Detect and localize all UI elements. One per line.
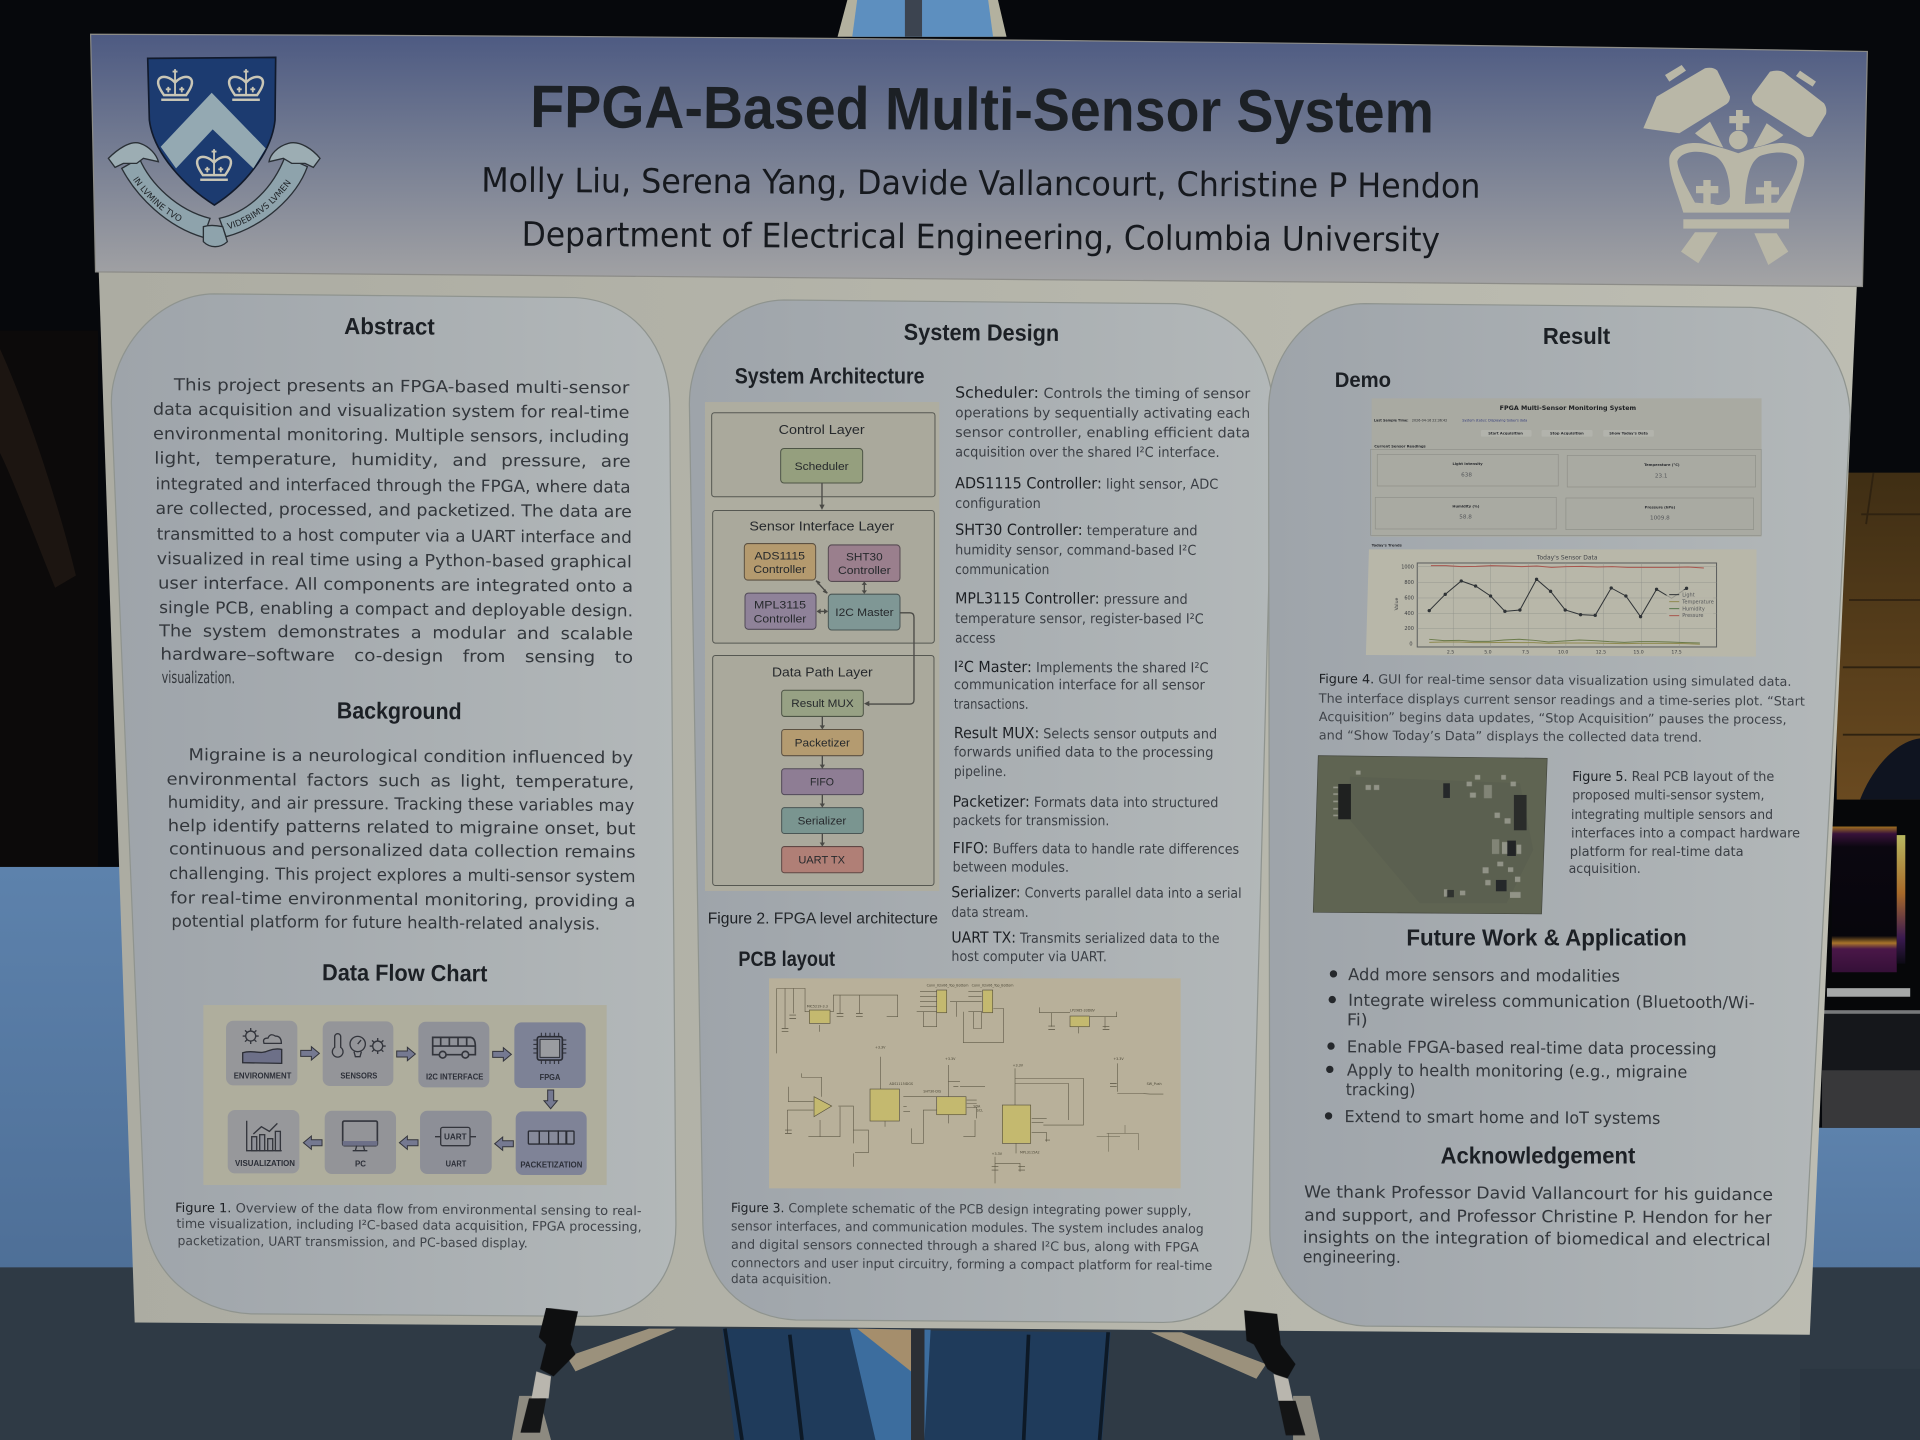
text: module descriptions: temperature sensor, register-based I²C xyxy=(955,611,1204,627)
box: UART TX xyxy=(782,847,863,873)
text: module descriptions: ADS1115 Controller: light sensor, ADC xyxy=(955,474,1218,493)
tile: FPGA: FPGA xyxy=(540,1073,561,1082)
caption: figure 3 xyxy=(731,1201,1212,1290)
heading: System Architecture: System Architecture xyxy=(735,363,924,388)
trend chart: 800 xyxy=(1404,580,1414,586)
figure: GUI screenshot: Current Sensor Readings xyxy=(1374,444,1426,448)
box: Scheduler xyxy=(781,449,863,483)
text: background body: for real-time environmental monitoring, providing a xyxy=(170,888,636,911)
figure: PCB schematic: Conn_02x06_Top_Bottom xyxy=(927,984,969,988)
text: background body: humidity, and air pressure. Tracking these variables may xyxy=(168,793,634,815)
text: background body: continuous and personalized data collection remains xyxy=(169,839,636,862)
figure: GUI screenshot: Today's Trends xyxy=(1372,544,1402,548)
trend chart: 1000 xyxy=(1401,565,1414,571)
text: module descriptions: Packetizer: Formats data into structured xyxy=(953,793,1218,811)
list: future work: Integrate wireless communication (Bluetooth/Wi- xyxy=(1348,991,1755,1012)
figure: PCB schematic: +3.3V xyxy=(1013,1064,1024,1068)
heading: Future Work & Application: Future Work & Application xyxy=(1406,924,1687,950)
text: abstract body: light, temperature, humidity, and pressure, are xyxy=(154,449,631,471)
tile: UART: UART xyxy=(444,1132,467,1142)
figure: PCB schematic: +3.3V xyxy=(992,1152,1003,1156)
text: module descriptions: packets for transmission. xyxy=(953,813,1109,829)
list: future work: Enable FPGA-based real-time data processing xyxy=(1347,1037,1717,1059)
layer labels: Control Layer xyxy=(779,423,865,437)
text: background body: Migraine is a neurological condition influenced by xyxy=(189,745,633,767)
heading: Data Flow Chart: Data Flow Chart xyxy=(322,959,488,986)
figure: GUI screenshot: System status: Displaying today's data xyxy=(1462,419,1527,423)
figure: GUI screenshot: Last Sample Time: xyxy=(1374,418,1409,422)
ribbon xyxy=(108,142,321,248)
caption: figure 1 xyxy=(175,1201,642,1252)
text: module descriptions: forwards unified data to the processing xyxy=(954,744,1213,761)
trend chart: 10.0 xyxy=(1558,650,1568,656)
layer labels xyxy=(749,423,894,680)
trend chart: Value xyxy=(1394,597,1400,610)
list: future work: Fi) xyxy=(1347,1010,1368,1030)
caption: figure 5: platform for real-time data xyxy=(1570,845,1744,860)
chart legend: Light xyxy=(1682,592,1695,598)
box: Packetizer: Packetizer xyxy=(795,737,850,749)
text: background body: challenging. This project explores a multi-sensor system xyxy=(169,864,636,886)
trend chart: 12.5 xyxy=(1596,650,1606,656)
trend chart: Today's Sensor Data xyxy=(1536,555,1598,562)
text: abstract body: This project presents an FPGA-based multi-sensor xyxy=(173,375,630,398)
trend chart xyxy=(1366,549,1757,657)
box: ADS1115: ADS1115 xyxy=(754,550,805,562)
figure: PCB schematic: +3.3V xyxy=(875,1045,886,1049)
caption: figure 5: acquisition. xyxy=(1569,862,1641,877)
box: I2C Master: I2C Master xyxy=(835,607,894,619)
text: module descriptions: communication xyxy=(955,562,1049,578)
caption: figure 5 xyxy=(1569,770,1800,877)
figure: PCB schematic: +3.3V xyxy=(945,1057,956,1061)
tile: environment: ENVIRONMENT xyxy=(234,1071,291,1080)
panel: left column xyxy=(111,294,676,1316)
heading: Result: Result xyxy=(1543,323,1610,349)
text: abstract body: data acquisition and visualization system for real-time xyxy=(153,400,629,422)
text: module descriptions: configuration xyxy=(955,496,1041,512)
figure: GUI screenshot: 1009.8 xyxy=(1650,516,1670,522)
text: abstract body: transmitted to a host computer via a UART interface and xyxy=(157,525,632,547)
layer labels: Data Path Layer xyxy=(772,665,873,680)
text: module descriptions: humidity sensor, command-based I²C xyxy=(955,542,1196,559)
GUI buttons: Stop Acquisition xyxy=(1550,432,1584,436)
trend chart: 400 xyxy=(1404,611,1414,617)
sensor reading cards xyxy=(1371,449,1761,535)
background: table cloth xyxy=(0,867,1920,1440)
chart legend: Humidity xyxy=(1682,606,1705,612)
box: Result MUX: Result MUX xyxy=(791,698,854,710)
figure: GUI screenshot: Humidity (%) xyxy=(1452,504,1480,508)
text: background body: potential platform for future health-related analysis. xyxy=(171,912,600,934)
box: MPL3115: MPL3115 xyxy=(754,600,806,612)
trend chart: 17.5 xyxy=(1671,650,1682,656)
tile: environment xyxy=(226,1021,297,1085)
text: abstract body: single PCB, enabling a compact and deployable design. xyxy=(159,598,633,620)
caption: figure 3: connectors and user input circuitry, forming a compact platform for real-time xyxy=(731,1256,1212,1274)
tile: PC: PC xyxy=(355,1160,366,1169)
trend chart: 7.5 xyxy=(1522,650,1529,656)
text: abstract body: visualized in real time using a Python-based graphical xyxy=(157,549,632,571)
text: module descriptions: I²C Master: Implements the shared I²C xyxy=(954,658,1209,676)
text: module descriptions: access xyxy=(955,631,996,647)
caption: figure 3: sensor interfaces, and communication modules. The system includes analog xyxy=(731,1219,1204,1237)
text: module descriptions: communication interface for all sensor xyxy=(954,677,1205,694)
figure: PCB photo xyxy=(1313,756,1547,914)
chart: data flow xyxy=(203,1005,607,1185)
tile: FPGA xyxy=(514,1022,586,1088)
figure: GUI screenshot: 638 xyxy=(1461,472,1472,478)
list: future work: Add more sensors and modalities xyxy=(1348,965,1620,986)
arrows: connections xyxy=(816,483,914,847)
heading: Background: Background xyxy=(337,697,462,724)
text: module descriptions: sensor controller, enabling efficient data xyxy=(955,425,1250,441)
text: module descriptions: data stream. xyxy=(951,905,1029,921)
text: abstract body: visualization. xyxy=(162,668,235,687)
GUI buttons: Show Today's Data xyxy=(1609,432,1648,436)
trend chart: 15.0 xyxy=(1633,650,1644,656)
figure: PCB schematic: MPL3115A2 xyxy=(1020,1150,1040,1154)
panel: middle column xyxy=(689,300,1273,1322)
figure: PCB schematic xyxy=(769,978,1181,1188)
tile: I2C interface: I2C INTERFACE xyxy=(426,1072,484,1081)
tile: visualization xyxy=(228,1110,299,1173)
text: acknowledgement xyxy=(1303,1182,1773,1269)
text: module descriptions xyxy=(951,384,1251,966)
heading: System Design: System Design xyxy=(904,319,1059,346)
ribbon: VIDEBIMVS LVMEN xyxy=(226,180,291,229)
box: SHT30: Controller xyxy=(838,565,891,577)
heading: PCB layout: PCB layout xyxy=(738,947,835,971)
figure: PCB schematic: MIC5219-3.3 xyxy=(807,1004,828,1008)
authors: Molly Liu, Serena Yang, Davide Vallancourt, Christine P Hendon xyxy=(481,161,1481,206)
caption: figure 4: and “Show Today’s Data” displays the collected data trend. xyxy=(1319,728,1702,746)
text: abstract body: user interface. All components are integrated onto a xyxy=(158,574,633,596)
trend chart: 5.0 xyxy=(1484,650,1492,656)
text: background body: environmental factors such as light, temperature, xyxy=(167,770,634,792)
chart legend: Temperature xyxy=(1681,599,1714,605)
chevron xyxy=(161,93,266,168)
GUI buttons xyxy=(1481,430,1654,437)
text: module descriptions: MPL3115 Controller: pressure and xyxy=(955,589,1188,608)
box: SHT30 xyxy=(828,545,900,581)
box: MPL3115: Controller xyxy=(754,613,807,625)
text: module descriptions: Result MUX: Selects sensor outputs and xyxy=(954,724,1217,743)
text: module descriptions: operations by sequentially activating each xyxy=(955,405,1250,422)
text: acknowledgement: and support, and Professor Christine P. Hendon for her xyxy=(1304,1206,1772,1227)
text: module descriptions: UART TX: Transmits serialized data to the xyxy=(951,929,1220,947)
caption: figure 1: time visualization, including I²C-based data acquisition, FPGA processing, xyxy=(176,1217,642,1235)
tile: UART xyxy=(420,1111,492,1174)
text: module descriptions: pipeline. xyxy=(954,764,1007,780)
caption: figure 1: Figure 1. Overview of the data flow from environmental sensing to real- xyxy=(175,1201,642,1219)
box: Packetizer xyxy=(782,730,863,756)
caption: figure 3: data acquisition. xyxy=(731,1272,831,1288)
text: background body xyxy=(167,745,636,934)
curtain and easel legs below poster xyxy=(512,1329,1320,1440)
chart legend xyxy=(1667,590,1714,620)
caption: figure 5: Figure 5. Real PCB layout of the xyxy=(1572,770,1774,785)
caption: figure 4: Figure 4. GUI for real-time sensor data visualization using simulated data. xyxy=(1319,672,1791,690)
department: Department of Electrical Engineering, Columbia University xyxy=(522,215,1440,259)
heading: Abstract: Abstract xyxy=(344,313,435,340)
list: future work: tracking) xyxy=(1346,1080,1416,1100)
trend chart: 2.5 xyxy=(1447,650,1454,656)
caption: figure 1: packetization, UART transmission, and PC-based display. xyxy=(178,1234,528,1251)
box: ADS1115: Controller xyxy=(753,564,806,576)
figure: PCB schematic: SCL xyxy=(977,1109,983,1113)
figure: PCB schematic: LP2985-33DBV xyxy=(1070,1009,1096,1013)
box: I2C Master xyxy=(828,594,900,630)
text: abstract body: hardware–software co-design from sensing to xyxy=(160,645,633,667)
figure: GUI screenshot: Light Intensity xyxy=(1452,462,1483,466)
caption: figure 4 xyxy=(1318,672,1805,746)
caption: figure 3: Figure 3. Complete schematic of the PCB design integrating power supply, xyxy=(731,1201,1191,1219)
tile: PC xyxy=(325,1111,396,1174)
caption: figure 4: The interface displays current sensor readings and a time-series plot. “Start xyxy=(1318,692,1805,710)
tile: UART: UART xyxy=(446,1160,466,1169)
figure: GUI screenshot: FPGA Multi-Sensor Monitoring System xyxy=(1500,405,1637,412)
figure: PCB schematic: SW_Push xyxy=(1147,1082,1162,1086)
text: acknowledgement: engineering. xyxy=(1303,1247,1401,1267)
caption: figure 2: Figure 2. FPGA level architecture xyxy=(708,910,938,927)
box: FIFO: FIFO xyxy=(810,776,834,789)
box: Serializer: Serializer xyxy=(798,815,847,828)
box: UART TX: UART TX xyxy=(798,854,845,866)
box: Scheduler: Scheduler xyxy=(795,461,849,473)
text: acknowledgement: We thank Professor David Vallancourt for his guidance xyxy=(1304,1182,1773,1204)
figure: PCB schematic: SHT30-DIS xyxy=(923,1090,941,1094)
box: FIFO xyxy=(782,769,863,795)
logo: Columbia crown xyxy=(1643,65,1826,265)
list: future work: Extend to smart home and IoT systems xyxy=(1344,1107,1660,1128)
caption: figure 4: Acquisition” begins data updates, “Stop Acquisition” pauses the process, xyxy=(1319,710,1787,728)
figure: GUI screenshot: Temperature (°C) xyxy=(1644,463,1680,467)
figure: PCB schematic: +3.3V xyxy=(1113,1057,1124,1061)
text: module descriptions: acquisition over the shared I²C interface. xyxy=(955,444,1220,461)
caption: figure 5: proposed multi-sensor system, xyxy=(1572,789,1764,804)
header band xyxy=(91,34,1867,287)
figure: GUI screenshot: 58.8 xyxy=(1459,515,1472,521)
tile: sensors xyxy=(323,1021,393,1086)
easel top xyxy=(838,0,1007,37)
figure: GUI screenshot: 2026-04-16 22:36:42 xyxy=(1412,418,1447,422)
GUI buttons: Start Acquisition xyxy=(1488,432,1523,436)
box: Serializer xyxy=(782,808,863,833)
list: future work: Apply to health monitoring (e.g., migraine xyxy=(1347,1061,1687,1082)
list: future work xyxy=(1325,965,1755,1129)
text: module descriptions: Serializer: Converts parallel data into a serial xyxy=(951,883,1242,902)
layer labels: Sensor Interface Layer xyxy=(749,519,894,534)
text: module descriptions: SHT30 Controller: temperature and xyxy=(955,521,1198,539)
figure: PCB schematic: Conn_02x06_Top_Bottom xyxy=(972,984,1014,988)
tile: packetization: PACKETIZATION xyxy=(520,1160,583,1169)
title: FPGA-Based Multi-Sensor System xyxy=(530,73,1434,146)
easel clips xyxy=(520,1308,1305,1435)
crest: Columbia shield xyxy=(108,56,321,248)
heading: Acknowledgement: Acknowledgement xyxy=(1441,1142,1636,1168)
heading: Demo: Demo xyxy=(1335,368,1391,392)
chart legend: Pressure xyxy=(1682,613,1704,619)
panel: right column xyxy=(1269,304,1850,1329)
text: module descriptions: Scheduler: Controls the timing of sensor xyxy=(955,384,1251,402)
text: module descriptions: transactions. xyxy=(954,697,1029,713)
caption: figure 3: and digital sensors connected through a shared I²C bus, along with FPGA xyxy=(731,1238,1199,1256)
trend chart: 600 xyxy=(1404,595,1414,601)
text: background body: help identify patterns related to migraine onset, but xyxy=(168,816,636,838)
figure: GUI screenshot: Pressure (hPa) xyxy=(1645,505,1675,509)
laptop with heat map xyxy=(1822,800,1920,1128)
tile: visualization: VISUALIZATION xyxy=(235,1159,295,1168)
tile: sensors: SENSORS xyxy=(340,1071,378,1080)
tile: packetization xyxy=(516,1111,587,1175)
figure: PCB schematic: ADS1115IDGS xyxy=(889,1082,913,1086)
text: abstract body: are collected, processed, and packetized. The data are xyxy=(156,499,632,521)
tile: I2C interface xyxy=(418,1022,489,1087)
text: abstract body: environmental monitoring. Multiple sensors, including xyxy=(153,424,629,446)
diagram: FPGA architecture xyxy=(705,402,939,891)
text: module descriptions: host computer via UART. xyxy=(951,949,1107,965)
text: abstract body xyxy=(153,375,633,690)
box: MPL3115 xyxy=(745,593,816,629)
box: Result MUX xyxy=(782,690,863,716)
figure: GUI screenshot xyxy=(1366,398,1762,657)
text: abstract body: integrated and interfaced through the FPGA, where data xyxy=(156,474,631,497)
text: module descriptions: between modules. xyxy=(953,860,1069,876)
trend chart: 200 xyxy=(1404,626,1414,632)
trend chart: 0 xyxy=(1409,641,1413,647)
text: abstract body: The system demonstrates a modular and scalable xyxy=(158,621,633,644)
caption: figure 5: integrating multiple sensors and xyxy=(1571,808,1773,823)
text: module descriptions: FIFO: Buffers data to handle rate differences xyxy=(953,839,1239,858)
ribbon: IN LVMINE TVO xyxy=(133,176,182,221)
box: ADS1115 xyxy=(744,544,816,580)
figure: PCB schematic: SDA xyxy=(973,1104,981,1108)
crowns xyxy=(158,69,263,181)
caption: figure 5: interfaces into a compact hardware xyxy=(1571,827,1800,842)
arrows: flow xyxy=(301,1047,557,1150)
box: SHT30: SHT30 xyxy=(846,551,883,563)
shield xyxy=(148,57,276,205)
text: acknowledgement: insights on the integration of biomedical and electrical xyxy=(1303,1228,1771,1250)
figure: GUI screenshot: 23.1 xyxy=(1655,473,1668,479)
